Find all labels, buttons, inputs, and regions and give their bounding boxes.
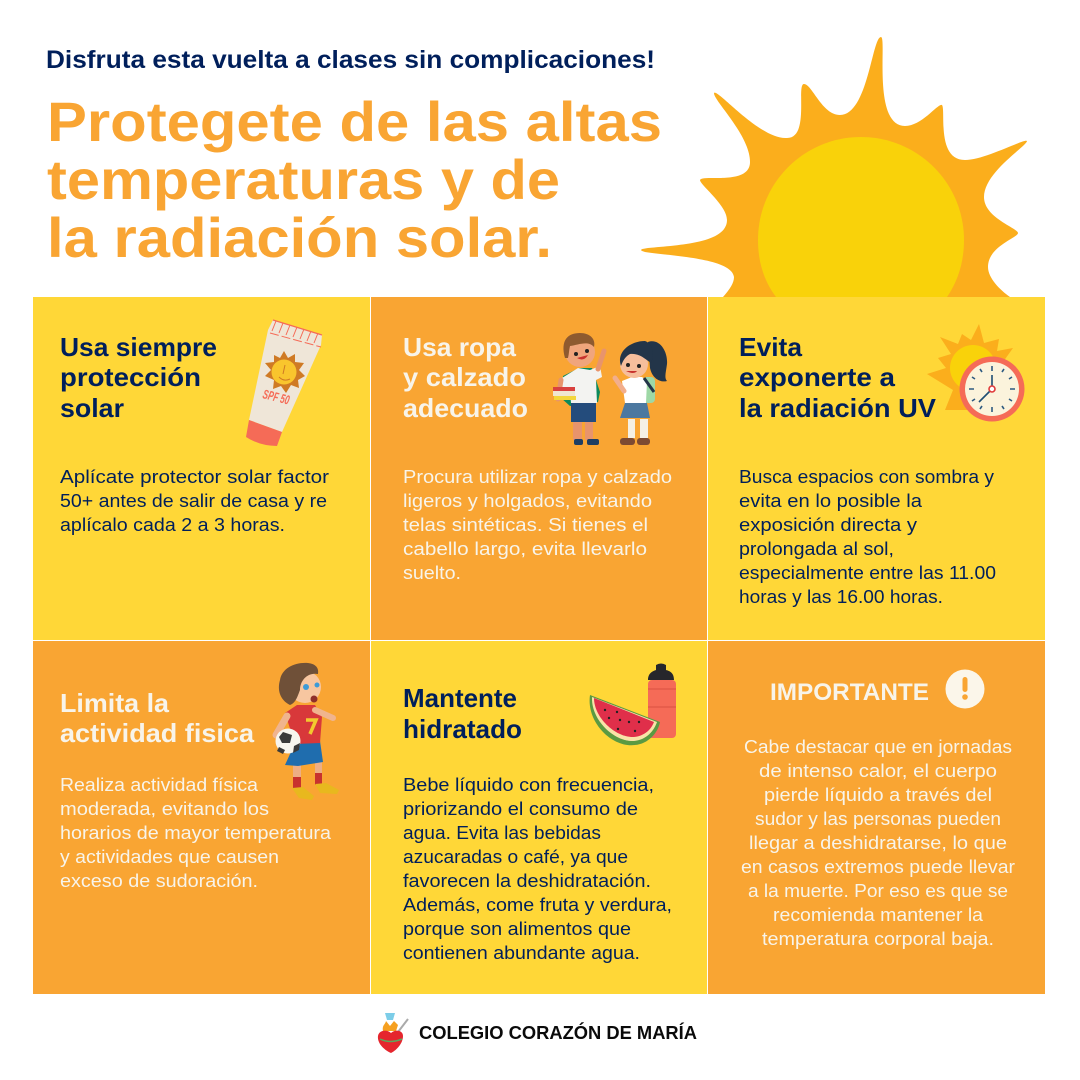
heading: protección solar: Usa siempre	[60, 332, 217, 362]
body: importante: recomienda mantener la	[773, 905, 984, 925]
body: hidratación: Bebe líquido con frecuencia,	[403, 775, 654, 795]
icon: exclamation mark	[946, 670, 984, 708]
subtitle: Disfruta esta vuelta a clases sin complicaciones!	[46, 46, 655, 74]
body: ropa y calzado	[403, 467, 672, 583]
body: ropa y calzado: ligeros y holgados, evitando	[403, 491, 652, 511]
heading: ropa y calzado: Usa ropa	[403, 332, 517, 362]
icon: sunscreen tube	[246, 320, 322, 446]
body: radiación UV: especialmente entre las 11.00	[739, 563, 996, 583]
heading: radiación UV: Evita	[739, 332, 803, 362]
body: importante: de intenso calor, el cuerpo	[759, 761, 997, 781]
body: importante: llegar a deshidratarse, lo que	[749, 833, 1007, 853]
heading: actividad física	[60, 688, 255, 748]
heading: protección solar: solar	[60, 393, 124, 423]
body: actividad física: moderada, evitando los	[60, 799, 269, 819]
title: la radiación solar.	[47, 206, 552, 269]
panel: importante	[708, 641, 1045, 994]
body: importante: en casos extremos puede llevar	[741, 857, 1015, 877]
title: Protegete de las altas	[47, 90, 662, 153]
body: actividad física: y actividades que causen	[60, 847, 279, 867]
body: hidratación: azucaradas o café, ya que	[403, 847, 628, 867]
body: radiación UV	[739, 467, 996, 607]
body: radiación UV: exposición directa y	[739, 515, 917, 535]
body: ropa y calzado: cabello largo, evita llevarlo	[403, 539, 647, 559]
icon: school children	[553, 333, 667, 445]
heading: hidratación: Mantente	[403, 683, 517, 713]
body: importante: sudor y las personas pueden	[755, 809, 1001, 829]
panel: hidratación	[371, 641, 707, 994]
heading: protección solar	[60, 332, 217, 423]
body: radiación UV: prolongada al sol,	[739, 539, 894, 559]
body: hidratación	[403, 775, 672, 963]
body: hidratación: contienen abundante agua.	[403, 943, 640, 963]
heading: ropa y calzado	[403, 332, 528, 423]
heading: actividad física: Limita la	[60, 688, 170, 718]
panel: protección solar	[33, 297, 370, 640]
body: protección solar: 50+ antes de salir de casa y re	[60, 491, 327, 511]
body: actividad física: exceso de sudoración.	[60, 871, 258, 891]
body: importante	[741, 737, 1015, 949]
heading: actividad física: actividad fisica	[60, 718, 255, 748]
heading: protección solar: protección	[60, 362, 201, 392]
icon: sun and clock	[927, 324, 1024, 422]
heading: radiación UV	[739, 332, 937, 423]
body: ropa y calzado: suelto.	[403, 563, 461, 583]
body: hidratación: porque son alimentos que	[403, 919, 631, 939]
icon: large sun	[641, 37, 1027, 297]
title: temperaturas y de	[47, 148, 560, 211]
icon: boy with ball	[276, 663, 339, 800]
body: ropa y calzado: Procura utilizar ropa y calzado	[403, 467, 672, 487]
body: protección solar: aplícalo cada 2 a 3 horas.	[60, 515, 285, 535]
body: protección solar	[60, 467, 329, 535]
heading: ropa y calzado: y calzado	[403, 362, 526, 392]
icon: bottle and watermelon	[590, 664, 676, 745]
body: actividad física: horarios de mayor temperatura	[60, 823, 332, 843]
body: importante: a la muerte. Por eso es que se	[748, 881, 1008, 901]
body: hidratación: priorizando el consumo de	[403, 799, 638, 819]
heading: hidratación: hidratado	[403, 714, 522, 744]
panel: actividad física	[33, 641, 370, 994]
footer: school name: COLEGIO CORAZÓN DE MARÍA	[419, 1022, 697, 1043]
body: importante: temperatura corporal baja.	[762, 929, 994, 949]
heading: ropa y calzado: adecuado	[403, 393, 528, 423]
body: radiación UV: evita en lo posible la	[739, 491, 923, 511]
heading: radiación UV: exponerte a	[739, 362, 896, 392]
body: radiación UV: horas y las 16.00 horas.	[739, 587, 943, 607]
icon: school crest	[378, 1013, 408, 1053]
body: protección solar: Aplícate protector solar factor	[60, 467, 329, 487]
heading: hidratación	[403, 683, 522, 744]
body: ropa y calzado: telas sintéticas. Si tienes el	[403, 515, 648, 535]
body: hidratación: favorecen la deshidratación.	[403, 871, 651, 891]
body: importante: pierde líquido a través del	[764, 785, 992, 805]
panel: ropa y calzado	[371, 297, 707, 640]
heading: radiación UV: la radiación UV	[739, 393, 937, 423]
body: actividad física: Realiza actividad física	[60, 775, 259, 795]
panel: radiación UV	[708, 297, 1045, 640]
body: hidratación: Además, come fruta y verdura,	[403, 895, 672, 915]
body: radiación UV: Busca espacios con sombra y	[739, 467, 994, 487]
body: hidratación: agua. Evita las bebidas	[403, 823, 601, 843]
heading: importante: IMPORTANTE	[770, 679, 929, 706]
body: importante: Cabe destacar que en jornadas	[744, 737, 1012, 757]
body: actividad física	[60, 775, 332, 891]
icon: sunscreen tube: SPF 50	[261, 386, 292, 408]
title	[47, 90, 662, 269]
